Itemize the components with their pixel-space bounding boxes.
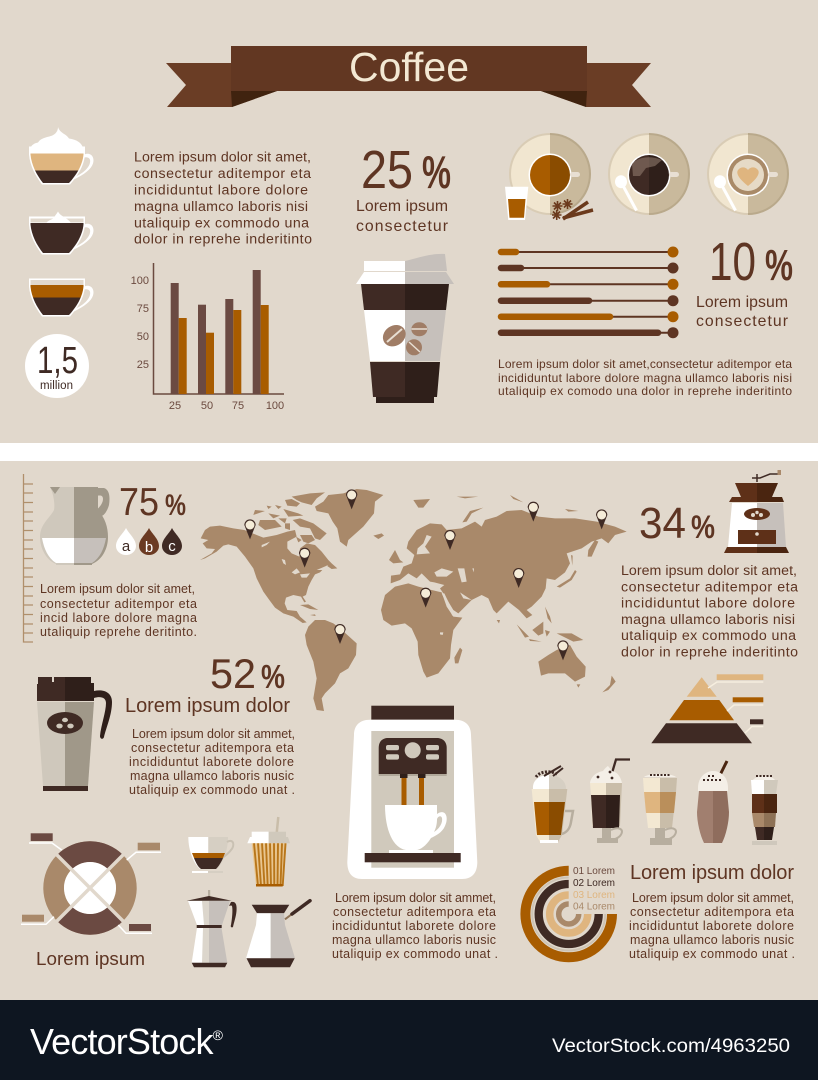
text block: grinder paragraph: consectetur aditempor eta bbox=[621, 580, 798, 596]
text block: right paragraph: utaliquip ex comodo una dolor in reprehe inderitinto bbox=[498, 384, 792, 398]
western hemisphere bbox=[200, 489, 384, 711]
icon: layered latte glass bbox=[643, 774, 677, 845]
stat: 75%: 75 bbox=[119, 481, 159, 524]
text block: mug paragraph: utaliquip ex commodo unat . bbox=[129, 783, 295, 797]
icon: pyramid chart bbox=[651, 674, 763, 743]
stat circle: 1,5 million: million bbox=[40, 380, 73, 392]
pins bbox=[244, 489, 607, 660]
text block: machine paragraph: utaliquip ex commodo unat . bbox=[332, 947, 498, 961]
icon: drink glass with orange coffee bbox=[532, 766, 573, 843]
bar chart: 50 bbox=[201, 400, 213, 412]
icon: coffee grinder bbox=[724, 470, 789, 553]
icon: cezve bbox=[246, 901, 310, 967]
icon: saucer with latte art heart bbox=[707, 133, 789, 215]
heading and text block: bottom right: consectetur aditempora eta bbox=[630, 905, 794, 919]
stat: 10%: % bbox=[765, 241, 793, 290]
icons: drops a b c bbox=[116, 528, 182, 556]
text block: grinder paragraph: utaliquip ex commodo una bbox=[621, 628, 796, 644]
icon: glass bbox=[505, 187, 528, 220]
text block: mug paragraph: Lorem ipsum dolor sit ammet, bbox=[132, 727, 295, 741]
logo text: VectorStock bbox=[30, 1021, 213, 1062]
text block: mug paragraph bbox=[129, 727, 295, 797]
text block: jug paragraph bbox=[40, 582, 197, 639]
stat: 75% bbox=[119, 481, 186, 524]
icon: saucer with black coffee and spoon bbox=[608, 133, 690, 215]
stat circle: 1,5 million: 1,5 bbox=[37, 340, 78, 382]
bar chart: 25 bbox=[137, 359, 149, 371]
icons: drops a b c: b bbox=[145, 539, 153, 556]
arc chart: 01 Lorem bbox=[573, 866, 615, 877]
logo text: ® bbox=[213, 1027, 224, 1043]
bar chart: 50 bbox=[137, 331, 149, 343]
ring chart with callouts bbox=[21, 833, 161, 933]
stat: 10%: Lorem ipsum bbox=[696, 294, 788, 311]
text block: intro: magna ullamco laboris nisi bbox=[134, 199, 308, 215]
text block: intro: utaliquip ex commodo una bbox=[134, 216, 309, 232]
icon: black coffee with foam bbox=[29, 212, 94, 255]
stat: 25% bbox=[356, 140, 451, 235]
title: Coffee bbox=[349, 44, 469, 90]
heading and text block: bottom right: utaliquip ex commodo unat . bbox=[629, 947, 795, 961]
icon: mocha glass with stick bbox=[697, 761, 729, 843]
stat: 75%: % bbox=[165, 489, 186, 522]
stat: 25%: Lorem ipsum bbox=[356, 198, 448, 215]
stat circle: 1,5 million bbox=[25, 334, 89, 398]
arc chart: 02 Lorem bbox=[573, 878, 615, 889]
heading and text block: bottom right: Lorem ipsum dolor bbox=[630, 862, 794, 884]
text block: machine paragraph: Lorem ipsum dolor sit ammet, bbox=[335, 891, 496, 905]
eastern hemisphere bbox=[381, 495, 627, 692]
footer bar bbox=[0, 1000, 818, 1080]
ruler bbox=[24, 474, 33, 642]
white divider band bbox=[0, 443, 818, 461]
bar chart: 25 bbox=[169, 400, 181, 412]
text block: right paragraph: incididuntut labore dolore magna ullamco laboris nisi bbox=[498, 371, 792, 385]
text block: right paragraph: Lorem ipsum dolor sit amet,consectetur aditempor eta bbox=[498, 357, 792, 371]
text block: machine paragraph: incididuntut laborete dolore bbox=[332, 919, 496, 933]
arc chart: 03 Lorem bbox=[573, 890, 615, 901]
text block: mug paragraph: consectetur aditempora eta bbox=[131, 741, 294, 755]
bar chart bbox=[131, 263, 284, 412]
icon: moka pot bbox=[187, 890, 237, 967]
bar chart: 75 bbox=[137, 303, 149, 315]
icon: milk jug bbox=[40, 487, 109, 565]
icon: saucer with orange coffee, glass and cinnamon bbox=[505, 133, 593, 220]
heading and text block: bottom right: Lorem ipsum dolor sit ammet, bbox=[632, 891, 794, 905]
icon: cinnamon and anise bbox=[552, 199, 593, 220]
bar chart: 100 bbox=[131, 275, 149, 287]
text block: mug paragraph: magna ullamco laboris nusic bbox=[130, 769, 294, 783]
icon: small espresso cup bbox=[188, 837, 233, 873]
stat: 34%: % bbox=[691, 509, 715, 545]
icon: travel mug bbox=[37, 677, 112, 791]
icon: tall glass with dark coffee and straw bbox=[590, 760, 630, 843]
text block: jug paragraph: incid labore dolore magna bbox=[40, 611, 197, 625]
heading and text block: bottom right: magna ullamco laboris nusic bbox=[630, 933, 794, 947]
icon: layered tall glass bbox=[751, 776, 778, 845]
stat: 52%: 52 bbox=[210, 650, 256, 697]
world map bbox=[200, 489, 627, 711]
icon: takeaway coffee cup bbox=[356, 254, 454, 403]
title banner bbox=[166, 44, 651, 107]
icon: paper cup with straw bbox=[247, 817, 290, 886]
text block: intro: incididuntut labore dolore bbox=[134, 182, 308, 198]
text block: machine paragraph: consectetur aditempora eta bbox=[333, 905, 496, 919]
text block: intro: consectetur aditempor eta bbox=[134, 166, 311, 182]
text block: jug paragraph: Lorem ipsum dolor sit amet, bbox=[40, 582, 195, 596]
text block: grinder paragraph: magna ullamco laboris nisi bbox=[621, 612, 795, 628]
url text: VectorStock.com/4963250 bbox=[552, 1035, 790, 1057]
text block: grinder paragraph: dolor in reprehe inderitinto bbox=[621, 644, 798, 660]
text block: machine paragraph bbox=[332, 891, 498, 961]
icons: drops a b c: a bbox=[122, 538, 131, 555]
text block: grinder paragraph: Lorem ipsum dolor sit amet, bbox=[621, 563, 797, 579]
label: Lorem ipsum: Lorem ipsum bbox=[36, 948, 145, 969]
stat: 34%: 34 bbox=[639, 499, 686, 548]
text block: intro: dolor in reprehe inderitinto bbox=[134, 232, 312, 248]
slider chart bbox=[501, 246, 678, 338]
text block: grinder paragraph bbox=[621, 563, 798, 660]
text block: intro bbox=[134, 150, 312, 248]
icon: coffee cup with whipped cream bbox=[29, 127, 94, 184]
bar chart: 100 bbox=[266, 400, 284, 412]
stat: 10%: consectetur bbox=[696, 313, 788, 330]
stat: 52% bbox=[125, 650, 290, 717]
bar chart: 75 bbox=[232, 400, 244, 412]
icon: layered espresso cup bbox=[29, 278, 94, 316]
text block: jug paragraph: consectetur aditempor eta bbox=[40, 597, 197, 611]
text block: grinder paragraph: incididuntut labore dolore bbox=[621, 596, 795, 612]
heading: Lorem ipsum dolor bbox=[125, 695, 290, 717]
text block: mug paragraph: incididuntut laborete dolore bbox=[129, 755, 294, 769]
stat: 10% bbox=[696, 232, 793, 330]
stat: 52%: % bbox=[261, 658, 285, 695]
icon: espresso machine bbox=[347, 706, 477, 879]
text block: machine paragraph: magna ullamco laboris nusic bbox=[332, 933, 496, 947]
stat: 25%: 25 bbox=[361, 140, 413, 200]
heading and text block: bottom right: incididuntut laborete dolore bbox=[629, 919, 794, 933]
icon: coffee beans bbox=[379, 321, 427, 355]
icons: drops a b c: c bbox=[168, 538, 176, 555]
stat: 10%: 10 bbox=[709, 232, 756, 292]
heading and text block: bottom right bbox=[629, 862, 795, 961]
arc chart bbox=[525, 866, 615, 957]
arc chart: 04 Lorem bbox=[573, 902, 615, 912]
text block: intro: Lorem ipsum dolor sit amet, bbox=[134, 150, 311, 166]
text block: right paragraph bbox=[498, 357, 792, 398]
text block: jug paragraph: utaliquip reprehe deritinto. bbox=[40, 625, 197, 639]
stat: 25%: consectetur bbox=[356, 218, 448, 235]
stat: 34% bbox=[639, 499, 715, 548]
stat: 25%: % bbox=[422, 146, 451, 198]
